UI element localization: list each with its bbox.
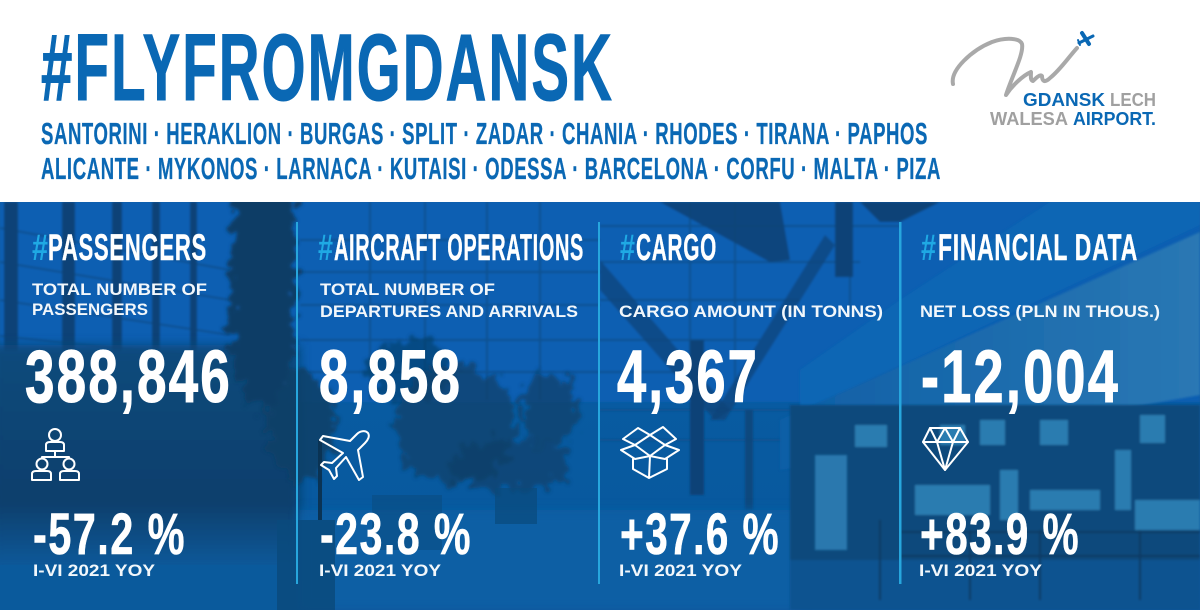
value: 388,846 [25, 335, 232, 418]
planters [277, 488, 537, 610]
description [32, 280, 207, 319]
change: -57.2 % [33, 502, 186, 567]
destinations list [41, 116, 941, 186]
panel: aircraft operations [318, 227, 584, 580]
panel: cargo [617, 227, 883, 580]
heading: PASSENGERS [48, 227, 207, 268]
heading [32, 227, 207, 268]
period: I-VI 2021 YOY [919, 561, 1043, 580]
title: #FLYFROMGDANSK [41, 15, 614, 121]
central hall floor [300, 510, 800, 610]
panel: passengers [25, 227, 232, 580]
header background [0, 0, 1200, 202]
heading: # [32, 227, 48, 268]
logo: Gdansk Lech Walesa Airport: LECH [1110, 90, 1156, 110]
icon: people hierarchy [32, 429, 79, 480]
period: I-VI 2021 YOY [33, 561, 156, 580]
description: DEPARTURES AND ARRIVALS [320, 302, 578, 321]
icon: logo plane [1078, 33, 1093, 45]
change: +37.6 % [620, 502, 780, 567]
window wall [0, 202, 1200, 510]
logo: Gdansk Lech Walesa Airport: WALESA [990, 109, 1068, 129]
heading: # [921, 227, 936, 268]
value: -12,004 [921, 335, 1120, 418]
value: 8,858 [319, 335, 462, 418]
icon: airplane [320, 431, 369, 480]
logo: Gdansk Lech Walesa Airport: GDANSK [1023, 90, 1105, 110]
description: PASSENGERS [32, 300, 148, 319]
left dark seating area [0, 345, 300, 570]
description [320, 280, 578, 321]
central desk panel [815, 455, 847, 550]
description: NET LOSS (PLN IN THOUS.) [920, 302, 1160, 321]
heading: CARGO [636, 227, 717, 268]
logo: Gdansk Lech Walesa Airport: AIRPORT. [1073, 109, 1156, 129]
right check-in counters [790, 405, 1200, 610]
right hall wedge [800, 358, 912, 405]
icon: diamond [923, 428, 968, 470]
icon: open box [621, 427, 679, 478]
heading: AIRCRAFT OPERATIONS [334, 227, 584, 268]
description: TOTAL NUMBER OF [320, 280, 495, 299]
period: I-VI 2021 YOY [619, 561, 743, 580]
column dividers [296, 222, 902, 584]
logo: Gdansk Lech Walesa Airport [953, 33, 1156, 129]
heading: # [620, 227, 635, 268]
description: TOTAL NUMBER OF [32, 280, 207, 299]
description: CARGO AMOUNT (IN TONNS) [619, 302, 883, 321]
period: I-VI 2021 YOY [319, 561, 442, 580]
heading [620, 227, 717, 268]
change: -23.8 % [320, 502, 472, 567]
background: airport terminal photo in blue duotone [0, 190, 1200, 610]
heading [318, 227, 584, 268]
value: 4,367 [617, 335, 759, 418]
central tree cluster [228, 190, 580, 491]
panel: financial data [919, 227, 1160, 580]
heading: # [318, 227, 333, 268]
change: +83.9 % [920, 502, 1080, 567]
